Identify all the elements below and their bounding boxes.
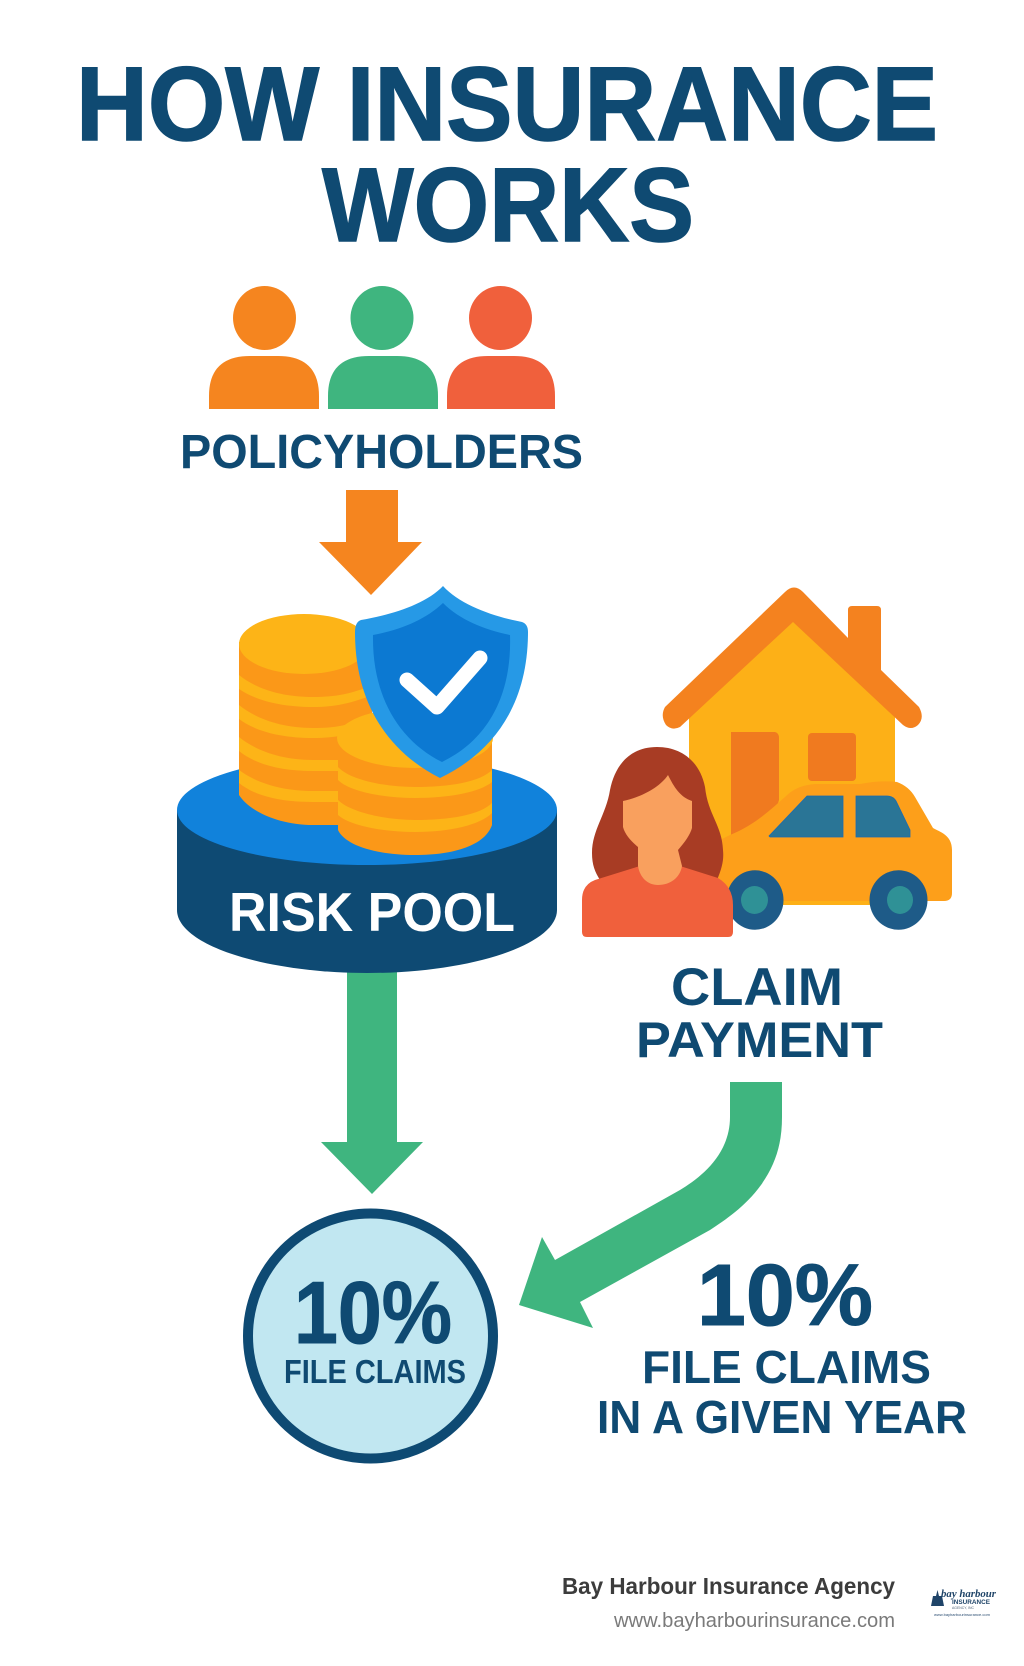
circle caption: FILE CLAIMS	[284, 1353, 466, 1390]
logo: AGENCY, INC	[952, 1605, 974, 1610]
logo: www.bayharbourinsurance.com	[934, 1613, 990, 1617]
logo: INSURANCE	[952, 1600, 990, 1606]
title: HOW INSURANCE	[76, 46, 938, 163]
face and neck	[623, 775, 692, 885]
label: risk pool: RISK POOL	[229, 881, 515, 943]
label: policyholders: POLICYHOLDERS	[180, 426, 583, 479]
car windows	[769, 796, 910, 837]
label: claim payment	[636, 958, 883, 1068]
icon: woman	[582, 747, 733, 937]
label: claim payment: PAYMENT	[636, 1012, 883, 1068]
circle: 10% file claims	[248, 1214, 493, 1458]
stat: 10% file claims in a given year	[597, 1247, 967, 1443]
risk pool platform	[177, 755, 557, 973]
house door	[731, 732, 779, 835]
logo: bay harbour	[941, 1588, 997, 1600]
arrow: claim payment curved	[519, 1082, 782, 1328]
hair	[592, 747, 723, 880]
coin stack: left	[239, 614, 372, 825]
house window	[808, 733, 856, 781]
torso	[582, 866, 733, 937]
stat: 10% file claims in a given year: FILE CLAIMS	[642, 1341, 931, 1393]
logo	[931, 1588, 997, 1617]
title: WORKS	[322, 147, 694, 264]
person: green	[328, 286, 438, 409]
arrow: risk pool to claims	[321, 965, 423, 1194]
footer text	[562, 1573, 895, 1632]
coin stack: right	[337, 708, 493, 855]
house roof and chimney	[663, 588, 922, 729]
person: red	[447, 286, 555, 409]
label: claim payment: CLAIM	[671, 958, 843, 1017]
icon: shield with check	[355, 586, 528, 778]
title	[76, 46, 938, 264]
icon: car	[700, 781, 952, 930]
footer text: www.bayharbourinsurance.com	[613, 1609, 895, 1632]
person: orange	[209, 286, 319, 409]
stat: 10% file claims in a given year: IN A GIVEN YEAR	[597, 1391, 967, 1443]
house wall	[689, 615, 895, 905]
arrow: policyholders to risk pool	[319, 490, 422, 595]
circle stat: 10%	[294, 1263, 452, 1362]
icon: house	[663, 588, 922, 905]
footer text: Bay Harbour Insurance Agency	[562, 1573, 895, 1599]
stat: 10% file claims in a given year: 10%	[697, 1247, 873, 1344]
icon: policyholders	[209, 286, 555, 409]
car wheels	[726, 870, 928, 930]
